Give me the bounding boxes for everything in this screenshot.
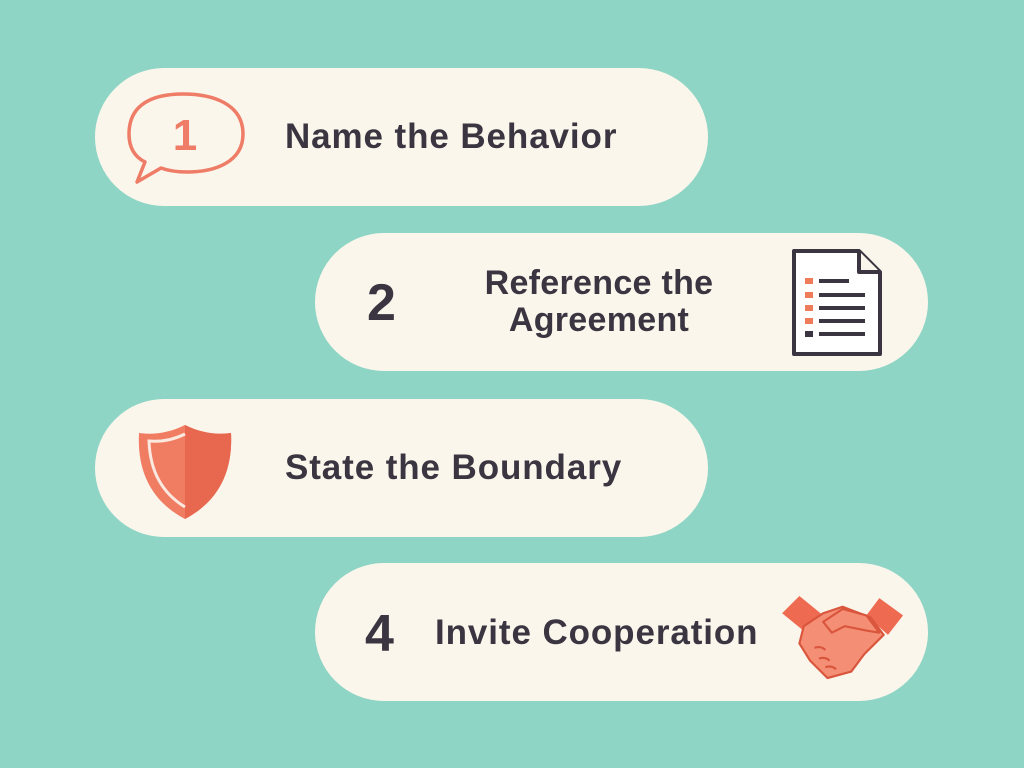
icon: speech bubble with 1: 1 (173, 111, 197, 160)
panel: step 3 (95, 399, 708, 537)
heading: Name the Behavior: Name the Behavior (285, 117, 617, 156)
panel: step 4 (315, 563, 928, 701)
icon: speech bubble with 1 (127, 92, 245, 184)
heading: Reference the Agreement (485, 264, 713, 339)
number 4: 4 (365, 605, 394, 663)
heading: State the Boundary: State the Boundary (285, 448, 622, 487)
panel: step 1 (95, 68, 708, 206)
panel: step 2 (315, 233, 928, 371)
heading: Reference the Agreement: Reference the (485, 264, 713, 302)
icon: handshake (782, 596, 903, 680)
heading: Invite Cooperation: Invite Cooperation (435, 613, 758, 652)
heading: Reference the Agreement: Agreement (509, 301, 689, 339)
number 2: 2 (367, 274, 396, 332)
icon: document (792, 249, 882, 356)
icon: shield (138, 425, 232, 519)
